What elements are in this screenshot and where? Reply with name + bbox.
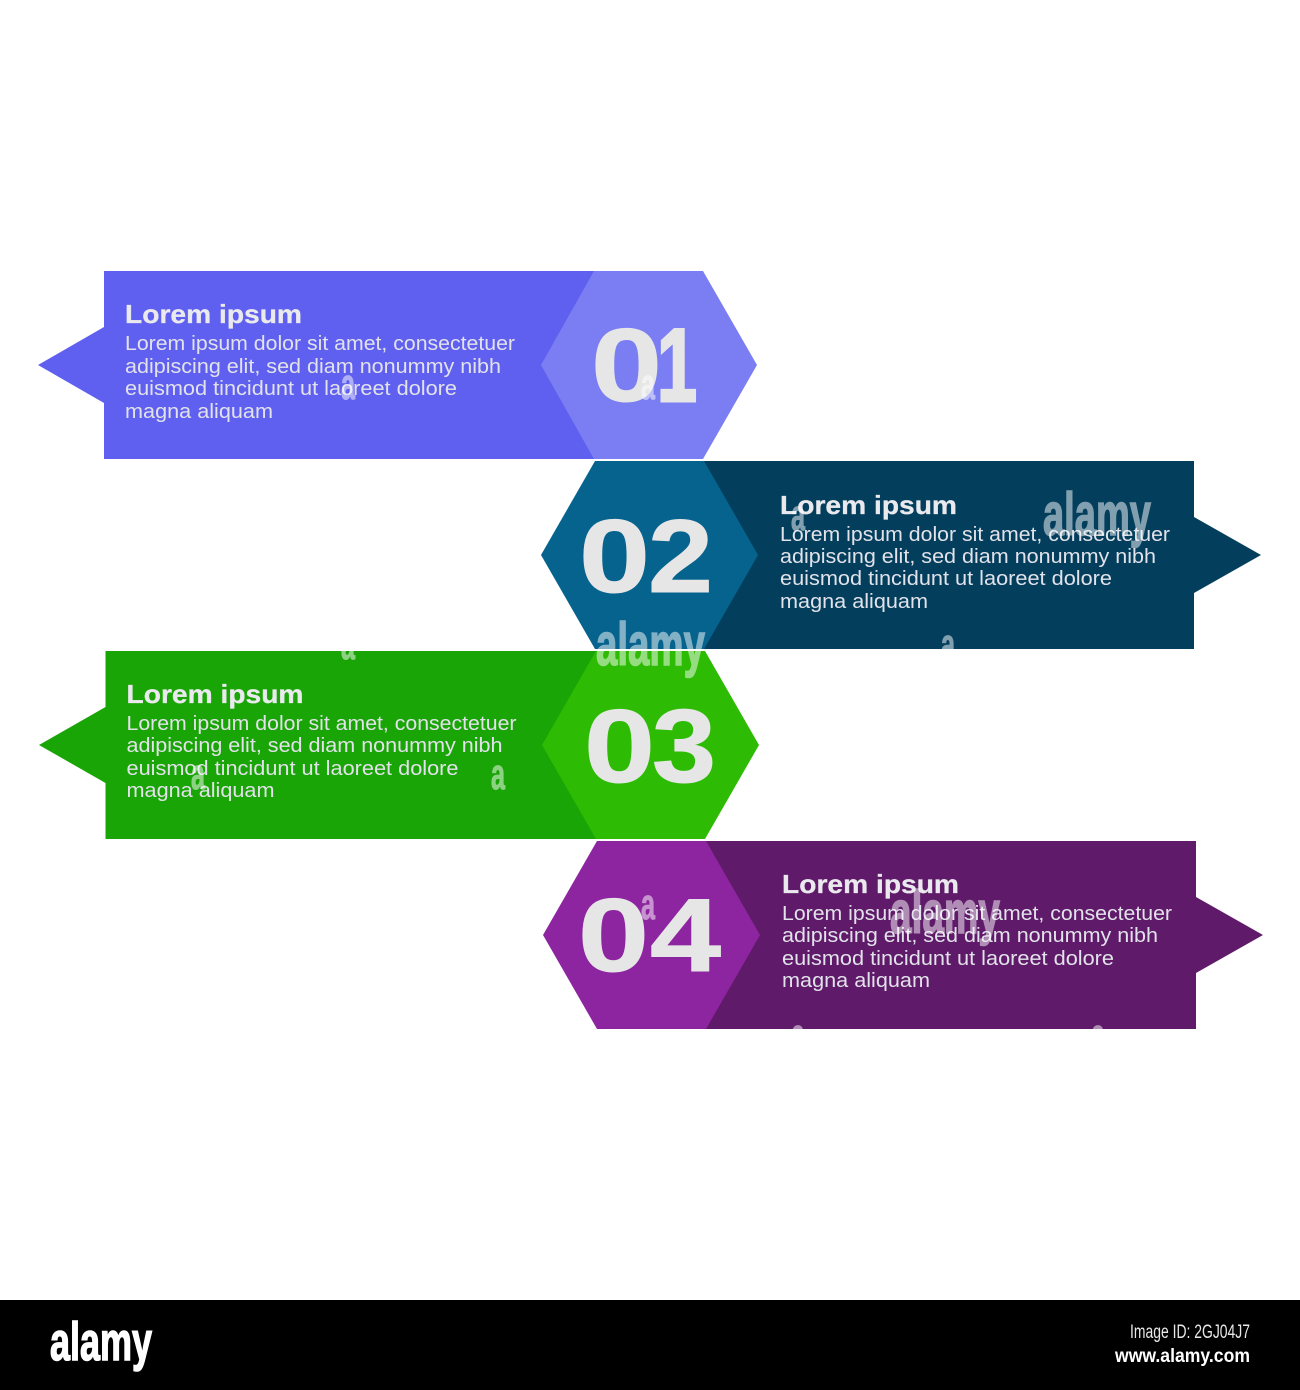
hexagon 03 [542, 651, 759, 839]
body text 04: Lorem ipsum dolor sit amet, consectetuer [782, 903, 1172, 925]
number 01: 1 [657, 308, 697, 424]
number 02: 2 [648, 499, 713, 615]
watermarks: a [1091, 1010, 1105, 1059]
watermarks [191, 360, 1151, 1059]
body text 01: Lorem ipsum dolor sit amet, consectetuer [125, 333, 515, 355]
banner 04 with right arrow [706, 841, 1263, 1029]
body text 01: magna aliquam [125, 401, 273, 423]
panel: step 04 [543, 841, 1263, 1029]
watermarks: a [341, 360, 355, 409]
footer logo: alamy [50, 1312, 152, 1372]
heading 04: Lorem ipsum [782, 869, 959, 899]
body text 01: euismod tincidunt ut laoreet dolore [125, 378, 457, 400]
body text 03: Lorem ipsum dolor sit amet, consectetuer [126, 713, 517, 735]
number 04: 4 [650, 878, 721, 994]
body text 03: euismod tincidunt ut laoreet dolore [126, 758, 458, 780]
watermarks: a [791, 491, 805, 540]
website url: www.alamy.com [1114, 1346, 1250, 1367]
number 01 [591, 308, 697, 424]
panel: step 02 [541, 461, 1261, 649]
watermarks: a [641, 880, 655, 929]
image id: Image ID: 2GJ04J7 [1130, 1322, 1250, 1343]
body text 02: Lorem ipsum dolor sit amet, consectetuer [780, 524, 1170, 546]
body text 04: euismod tincidunt ut laoreet dolore [782, 948, 1114, 970]
hexagon 01 [541, 271, 757, 459]
watermarks: a [641, 360, 655, 409]
banner 03 with left arrow [39, 651, 596, 839]
body text 03 [126, 713, 517, 802]
hexagon 04 [543, 841, 760, 1029]
body text 04: magna aliquam [782, 970, 930, 992]
watermarks: a [941, 620, 955, 669]
panel: step 03 [39, 651, 759, 839]
body text 02: magna aliquam [780, 591, 928, 613]
banner 01 with left arrow [38, 271, 594, 459]
footer bar [0, 1300, 1300, 1390]
banner 02 with right arrow [704, 461, 1261, 649]
number 03: 3 [652, 689, 716, 805]
body text 02: adipiscing elit, sed diam nonummy nibh [780, 546, 1156, 568]
body text 04 [782, 903, 1172, 992]
body text 02 [780, 524, 1170, 613]
number 04 [578, 878, 721, 994]
body text 01: adipiscing elit, sed diam nonummy nibh [125, 356, 501, 378]
heading 03: Lorem ipsum [126, 679, 304, 709]
watermarks: a [191, 750, 205, 799]
heading 02: Lorem ipsum [780, 490, 957, 520]
number 02: 0 [579, 499, 650, 615]
number 01: 0 [591, 308, 662, 424]
number 04: 0 [578, 878, 649, 994]
body text 04: adipiscing elit, sed diam nonummy nibh [782, 925, 1158, 947]
panel: step 01 [38, 271, 757, 459]
watermarks: a [791, 1010, 805, 1059]
heading 01: Lorem ipsum [125, 299, 302, 329]
number 02 [579, 499, 713, 615]
number 03 [584, 689, 716, 805]
watermarks: alamy [890, 879, 1000, 946]
watermarks: a [341, 620, 355, 669]
watermarks: a [491, 750, 505, 799]
body text 01 [125, 333, 515, 423]
body text 03: magna aliquam [126, 780, 274, 802]
watermarks: alamy [1043, 481, 1151, 548]
body text 02: euismod tincidunt ut laoreet dolore [780, 568, 1112, 590]
number 03: 0 [584, 689, 655, 805]
body text 03: adipiscing elit, sed diam nonummy nibh [126, 735, 502, 757]
hexagon 02 [541, 461, 758, 649]
watermarks: alamy [596, 611, 705, 678]
